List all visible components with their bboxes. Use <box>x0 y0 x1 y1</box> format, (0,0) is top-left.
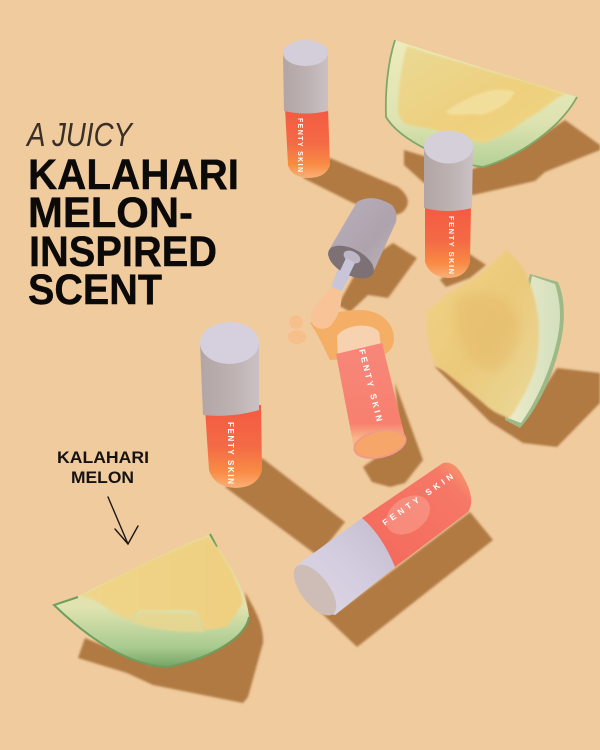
glass body <box>285 108 330 178</box>
rind <box>54 534 249 667</box>
swirl <box>379 487 437 543</box>
bottle: bottom, lying <box>286 463 471 622</box>
cap top <box>200 322 259 364</box>
applicator tip <box>311 287 342 329</box>
melon slice: bottom left <box>54 534 249 667</box>
title: Kalahari melon-inspired scent: KALAHARI <box>28 151 239 199</box>
open base <box>352 425 408 463</box>
brand text: FENTY SKIN <box>296 118 303 172</box>
title: Kalahari melon-inspired scent: SCENT <box>28 266 162 314</box>
wand collar <box>341 248 363 266</box>
heading block <box>25 116 251 314</box>
bottle: centre, open and lying <box>336 326 408 463</box>
cap end <box>286 558 344 622</box>
cap top <box>283 40 328 66</box>
wand stem <box>332 258 355 292</box>
flesh <box>426 250 539 418</box>
rind <box>505 274 564 428</box>
bottle: upper right <box>424 130 473 278</box>
cap <box>424 147 473 211</box>
rind <box>386 40 577 167</box>
eyebrow: A JUICY: A JUICY <box>25 116 134 153</box>
glass body <box>425 205 471 278</box>
arrow pointing to melon <box>108 497 138 544</box>
brand text: FENTY SKIN <box>357 348 385 422</box>
melon slice: top right <box>386 40 577 167</box>
bottle: top <box>283 40 330 178</box>
cap <box>200 342 259 416</box>
title: Kalahari melon-inspired scent: INSPIRED <box>29 228 217 276</box>
label: Kalahari melon: MELON <box>71 468 134 487</box>
drop <box>287 330 307 344</box>
flesh <box>80 537 243 630</box>
cap body <box>330 198 396 275</box>
melon slice: right <box>426 250 564 428</box>
flesh highlight <box>445 90 515 115</box>
cast shadows <box>78 120 600 703</box>
flesh shading <box>454 293 520 372</box>
drop <box>288 314 304 330</box>
glass body <box>362 463 471 567</box>
flesh <box>398 46 566 143</box>
rind edge <box>54 534 249 667</box>
wand <box>331 256 357 292</box>
cap <box>283 52 328 114</box>
puddle of oil and drops <box>287 310 394 360</box>
cap opening <box>323 239 379 285</box>
brand text: FENTY SKIN <box>447 216 456 274</box>
glass body <box>336 343 405 455</box>
bottle: left <box>200 322 262 488</box>
puddle <box>310 310 394 360</box>
rind edge <box>386 40 577 167</box>
brand text: FENTY SKIN <box>226 422 235 484</box>
cap <box>297 518 395 615</box>
dropper cap and applicator <box>323 198 396 292</box>
title: Kalahari melon-inspired scent: MELON- <box>28 189 193 237</box>
cap top <box>424 130 473 164</box>
neck <box>337 326 381 358</box>
label: Kalahari melon: KALAHARI <box>57 448 149 467</box>
pulp under flesh <box>100 602 205 632</box>
glass body <box>205 405 262 488</box>
brand text: FENTY SKIN <box>380 471 455 528</box>
